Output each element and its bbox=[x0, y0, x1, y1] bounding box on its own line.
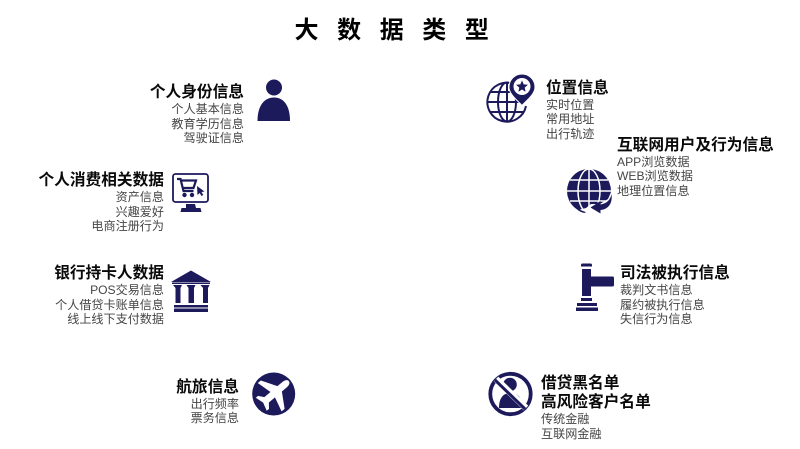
text: personal consumption bbox=[38, 171, 164, 233]
text: personal identity: 教育学历信息 bbox=[171, 116, 244, 130]
text: blacklist: 借贷黑名单 bbox=[541, 374, 619, 392]
icon: bank building bbox=[171, 270, 211, 312]
text: internet users bbox=[617, 136, 774, 198]
text: location: 常用地址 bbox=[546, 112, 594, 126]
panel: personal consumption bbox=[38, 171, 209, 233]
text: judicial enforcement bbox=[620, 264, 730, 326]
text: bank cardholder: 个人借贷卡账单信息 bbox=[55, 298, 164, 312]
text: personal consumption: 资产信息 bbox=[116, 190, 164, 204]
panel: blacklist bbox=[488, 372, 651, 440]
text: travel: 航旅信息 bbox=[176, 378, 239, 396]
text: bank cardholder: 线上线下支付数据 bbox=[67, 312, 164, 326]
text: travel: 出行频率 bbox=[191, 396, 239, 410]
text: internet users: 互联网用户及行为信息 bbox=[617, 136, 774, 154]
panel: travel bbox=[176, 372, 296, 425]
icon: banned person bbox=[488, 372, 533, 416]
icon: gavel bbox=[576, 264, 614, 311]
text: personal consumption: 兴趣爱好 bbox=[116, 204, 164, 218]
text: location: 出行轨迹 bbox=[546, 126, 594, 140]
text: location bbox=[546, 79, 609, 140]
title: 大数据类型 bbox=[294, 17, 508, 44]
text: blacklist: 互联网金融 bbox=[541, 426, 601, 440]
text: travel: 票务信息 bbox=[191, 411, 239, 425]
text: personal consumption: 个人消费相关数据 bbox=[38, 172, 164, 189]
text: bank cardholder bbox=[54, 264, 164, 326]
icon: globe with arrow bbox=[567, 169, 612, 214]
text: internet users: WEB浏览数据 bbox=[617, 169, 693, 183]
panel: location bbox=[486, 74, 609, 140]
text: judicial enforcement: 裁判文书信息 bbox=[620, 283, 693, 297]
text: bank cardholder: POS交易信息 bbox=[90, 283, 164, 297]
text: judicial enforcement: 失信行为信息 bbox=[620, 312, 693, 326]
icon: person bbox=[258, 80, 290, 121]
text: internet users: 地理位置信息 bbox=[617, 184, 690, 198]
text: blacklist bbox=[541, 374, 651, 440]
panel: internet users bbox=[567, 136, 774, 214]
text: travel bbox=[176, 378, 239, 425]
text: personal identity: 个人身份信息 bbox=[150, 84, 244, 101]
text: judicial enforcement: 履约被执行信息 bbox=[620, 298, 705, 312]
text: blacklist: 传统金融 bbox=[541, 412, 589, 426]
icon: shopping cart monitor bbox=[172, 173, 209, 212]
text: blacklist: 高风险客户名单 bbox=[541, 394, 651, 410]
text: bank cardholder: 银行持卡人数据 bbox=[54, 265, 164, 282]
text: internet users: APP浏览数据 bbox=[617, 154, 690, 168]
text: personal identity: 驾驶证信息 bbox=[184, 131, 244, 145]
text: personal identity bbox=[150, 83, 244, 145]
text: personal consumption: 电商注册行为 bbox=[91, 219, 164, 233]
text: location: 实时位置 bbox=[546, 98, 594, 112]
panel: judicial enforcement bbox=[576, 264, 730, 326]
text: location: 位置信息 bbox=[546, 80, 609, 96]
panel: personal identity bbox=[150, 80, 290, 145]
panel: bank cardholder bbox=[54, 264, 211, 326]
text: personal identity: 个人基本信息 bbox=[171, 102, 244, 116]
text: judicial enforcement: 司法被执行信息 bbox=[620, 265, 730, 282]
icon: globe with pin bbox=[486, 74, 534, 123]
icon: plane bbox=[252, 372, 296, 416]
